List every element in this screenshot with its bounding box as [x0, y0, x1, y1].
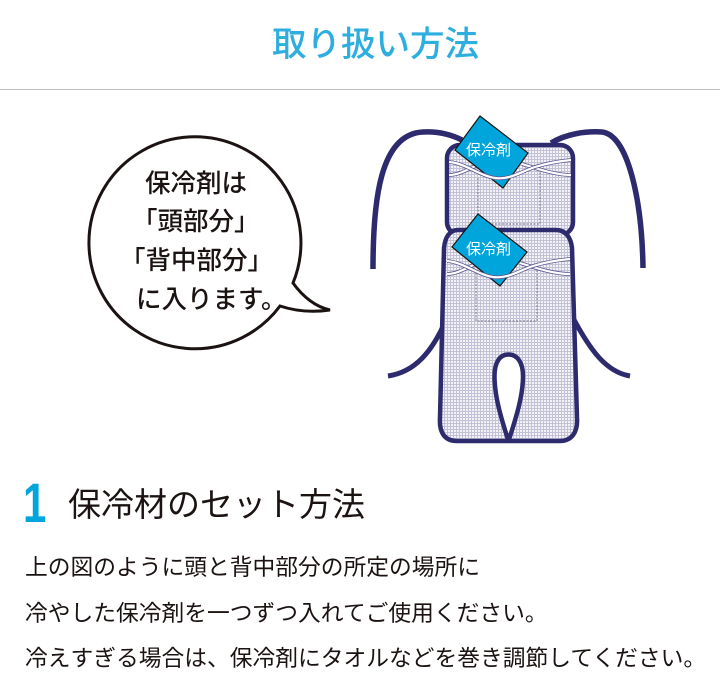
- speech bubble text: 保冷剤は: [145, 170, 247, 198]
- illustration: cooling pad: [373, 116, 643, 441]
- packet: back: 保冷剤: [466, 241, 511, 258]
- body text: 冷やした保冷剤を一つずつ入れてご使用ください。: [25, 600, 548, 626]
- divider: [0, 89, 720, 90]
- speech bubble text: 「背中部分」: [120, 247, 273, 275]
- strap: upper right: [551, 132, 643, 268]
- head pad: [447, 145, 573, 235]
- leg slit: [494, 354, 523, 441]
- packet: head: 保冷剤: [466, 142, 511, 159]
- strap: lower right: [572, 316, 630, 376]
- body text: [25, 554, 706, 671]
- back pad: [440, 230, 577, 441]
- body text: 冷えすぎる場合は、保冷剤にタオルなどを巻き調節してください。: [25, 645, 706, 671]
- step number: 1: [23, 471, 46, 534]
- body text: 上の図のように頭と背中部分の所定の場所に: [25, 554, 480, 580]
- head pad band: [449, 160, 571, 178]
- speech bubble text: 「頭部分」: [132, 208, 260, 236]
- speech bubble: [89, 137, 330, 349]
- back pad band: [447, 259, 570, 277]
- step heading: 保冷材のセット方法: [68, 486, 365, 523]
- strap: upper left: [373, 132, 462, 269]
- packet: head: [455, 116, 528, 188]
- strap: lower left: [388, 320, 446, 376]
- title: 取り扱い方法: [272, 26, 479, 64]
- speech bubble text: に入ります。: [136, 286, 286, 314]
- packet: back: [452, 214, 527, 286]
- speech bubble text: [120, 170, 286, 314]
